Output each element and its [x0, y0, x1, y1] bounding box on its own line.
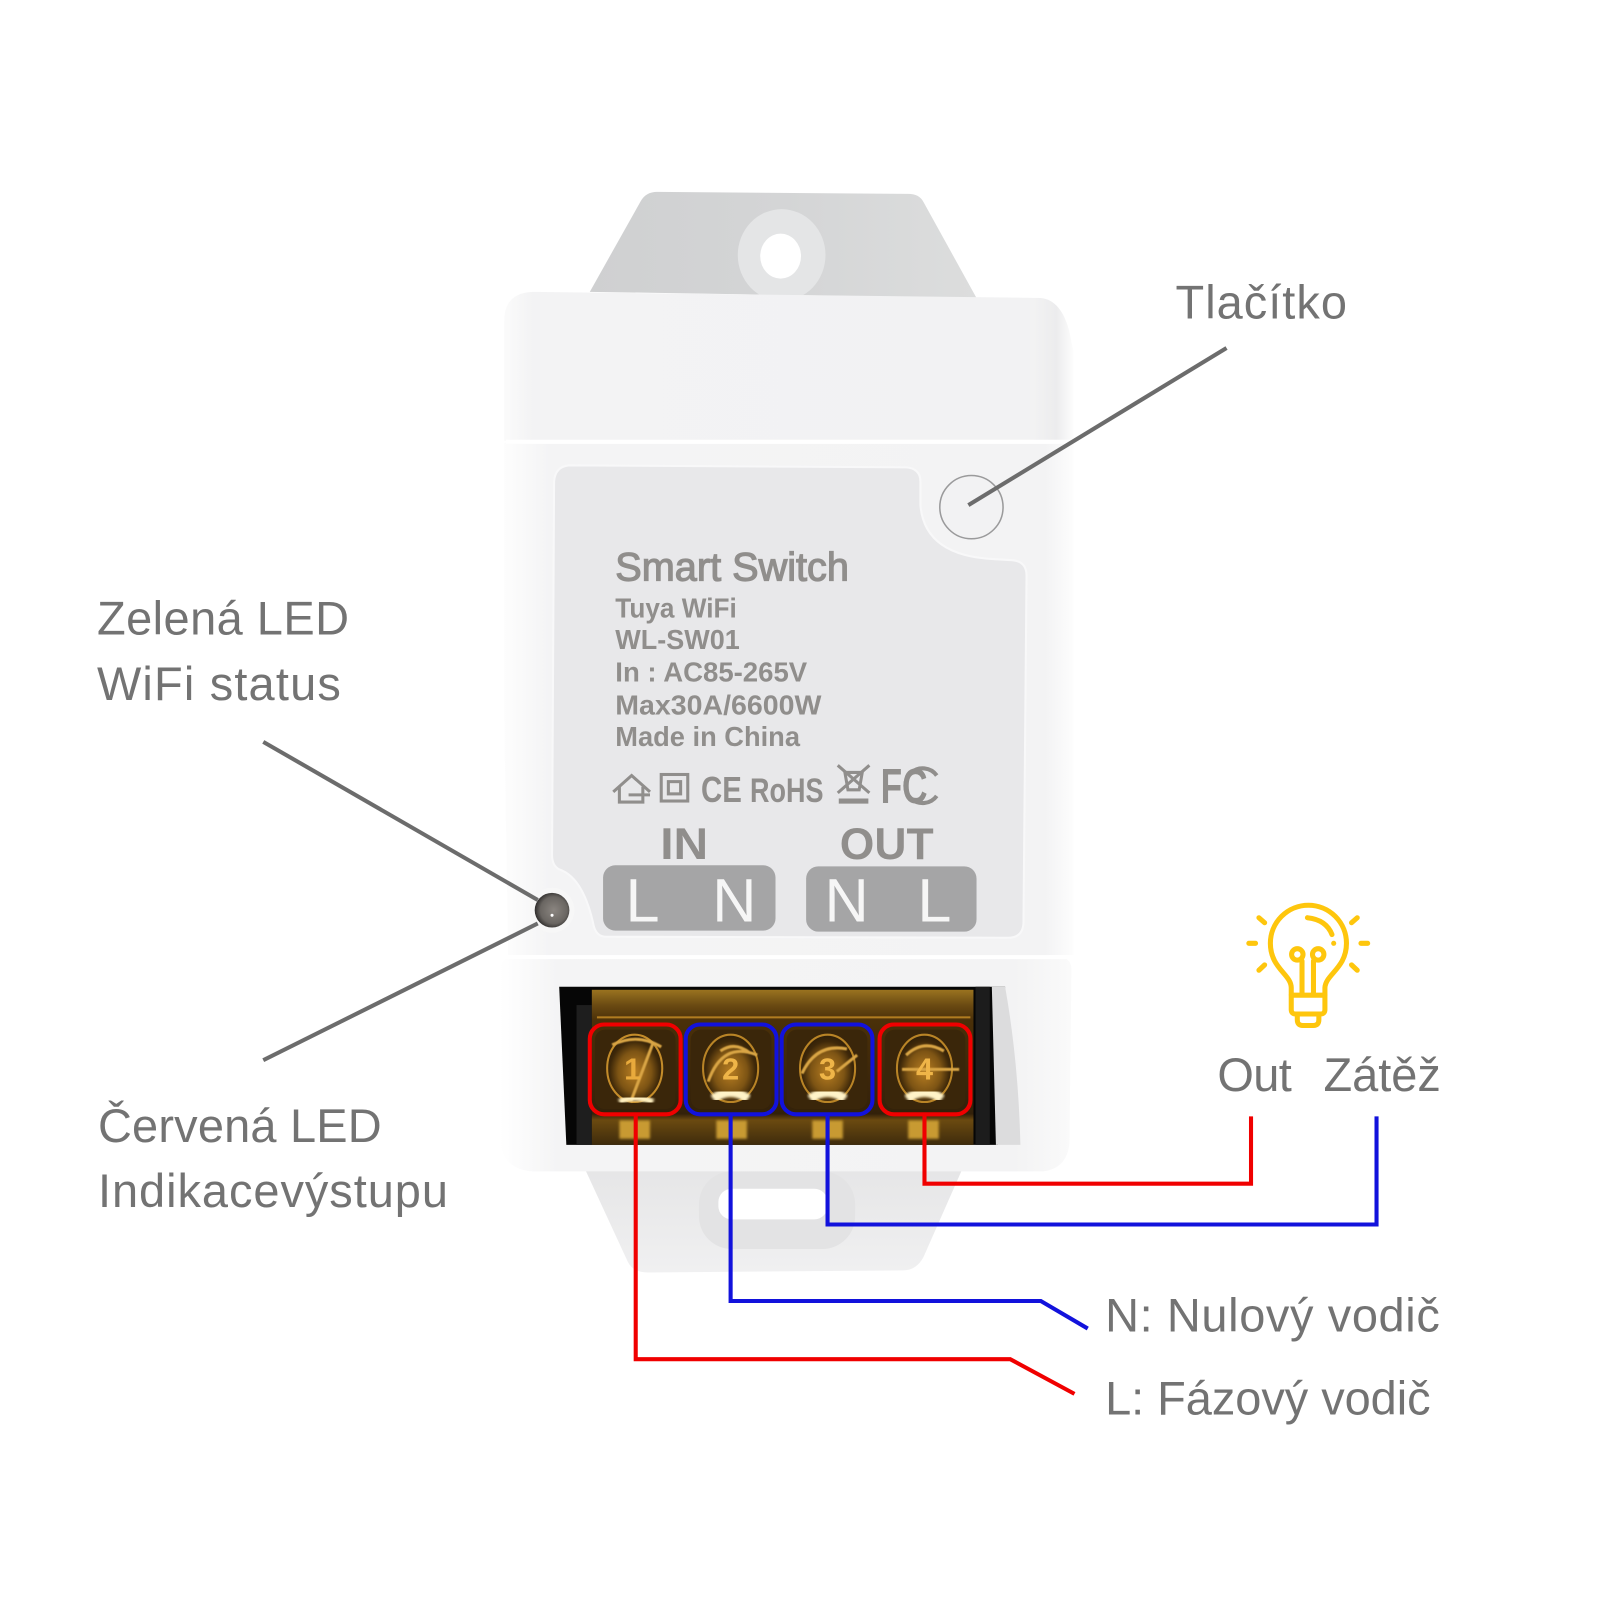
label: red LED [98, 1100, 448, 1217]
label: button: Tlačítko [1176, 276, 1347, 328]
icon: double insulation [661, 774, 688, 801]
wire: neutral to load [828, 1114, 1377, 1224]
FCC mark: FC [881, 760, 928, 814]
LED indicator [530, 888, 574, 933]
printed specification text: WL-SW01 [615, 624, 740, 655]
OUT terminal plate: L [917, 866, 951, 934]
terminal highlight: N output [782, 1024, 872, 1114]
icon: WEEE bin [838, 765, 869, 801]
printed specification text: In : AC85-265V [615, 657, 808, 688]
IN heading: IN [660, 818, 708, 869]
screw 2: 2 [722, 1053, 739, 1087]
IN terminal plate [603, 865, 776, 934]
IN terminal plate: N [712, 866, 756, 934]
OUT heading: OUT [840, 818, 934, 869]
OUT terminal plate [806, 866, 977, 934]
screw 2 [691, 1030, 771, 1109]
printed specification text: Tuya WiFi [615, 592, 737, 623]
device: smart switch [500, 192, 1073, 1272]
screw 1 [595, 1030, 676, 1109]
terminal highlight: L output [880, 1024, 970, 1114]
CE mark: CE [701, 770, 742, 810]
terminal block lower stubs [619, 1120, 939, 1139]
printed specification text [615, 546, 849, 752]
wire: phase conductor [636, 1114, 1074, 1394]
printed specification text: Smart Switch [615, 546, 849, 590]
IN terminal plate: L [626, 866, 660, 934]
button [940, 476, 1003, 539]
icon: indoor house [613, 776, 650, 802]
label: load: Zátěž [1323, 1049, 1441, 1101]
icon: light bulb [1249, 905, 1368, 1025]
wire: output to load [924, 1114, 1251, 1184]
terminal block [559, 987, 1020, 1145]
label: red LED: Indikacevýstupu [98, 1165, 448, 1217]
label: green LED: WiFi status [97, 658, 341, 710]
upper housing [504, 292, 1073, 441]
OUT terminal plate: N [824, 866, 869, 934]
label: out: Out [1217, 1049, 1292, 1101]
leader line: green LED [263, 742, 538, 900]
bottom mounting tab [578, 1153, 969, 1272]
lower housing [500, 957, 1071, 1171]
leader line: button [968, 348, 1227, 505]
terminal highlight: L input [590, 1024, 681, 1114]
RoHS mark: RoHS [750, 772, 823, 810]
label: green LED: Zelená LED [97, 593, 349, 645]
label panel [552, 465, 1027, 938]
printed specification text: Made in China [615, 721, 801, 752]
leader line: red LED [263, 923, 538, 1060]
top mounting tab [590, 192, 977, 301]
wire: neutral conductor [731, 1114, 1088, 1329]
screw 3 [787, 1030, 867, 1109]
terminal highlight: N input [686, 1024, 777, 1114]
label: green LED [97, 593, 349, 710]
middle housing [504, 443, 1073, 955]
certification icons [613, 760, 937, 814]
printed specification text: Max30A/6600W [615, 689, 821, 720]
screw 1: 1 [624, 1053, 641, 1087]
screw 3: 3 [819, 1053, 836, 1087]
label: red LED: Červená LED [98, 1100, 382, 1152]
screw 4: 4 [916, 1053, 933, 1087]
housing seams [504, 442, 1073, 957]
label: neutral conductor: N: Nulový vodič [1105, 1290, 1440, 1342]
screw 4 [885, 1030, 965, 1109]
label: phase conductor: L: Fázový vodič [1105, 1372, 1431, 1424]
